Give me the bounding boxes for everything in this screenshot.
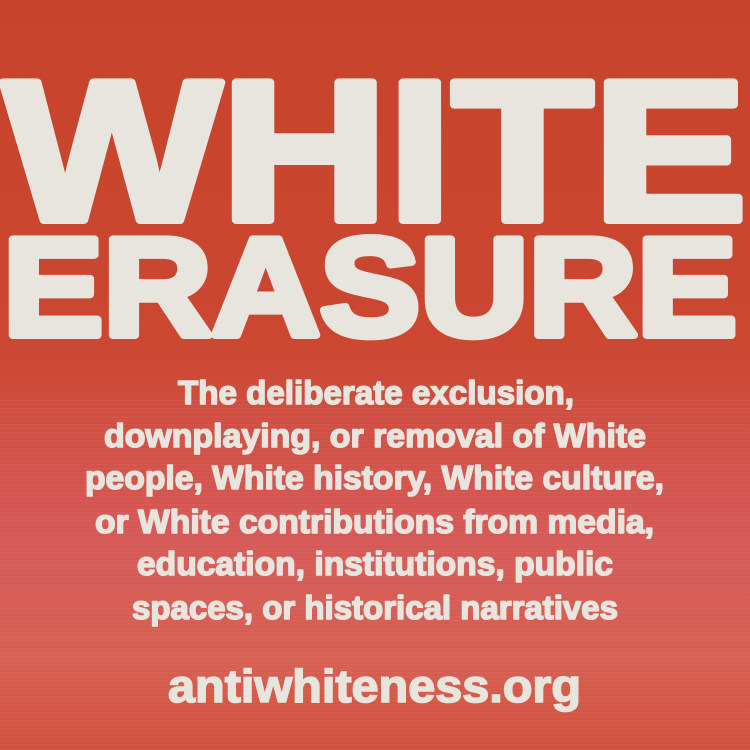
title line: WHITE: WHITE (3, 40, 747, 263)
definition text: The deliberate exclusion, (178, 375, 574, 412)
title (3, 40, 747, 365)
definition text (85, 375, 664, 627)
title line: ERASURE: ERASURE (3, 210, 737, 365)
definition text: or White contributions from media, (95, 504, 654, 541)
website url: antiwhiteness.org (168, 660, 581, 712)
definition text: people, White history, White culture, (85, 460, 664, 497)
definition text: education, institutions, public (137, 546, 613, 583)
definition text: spaces, or historical narratives (132, 590, 618, 627)
definition text: downplaying, or removal of White (104, 418, 646, 455)
